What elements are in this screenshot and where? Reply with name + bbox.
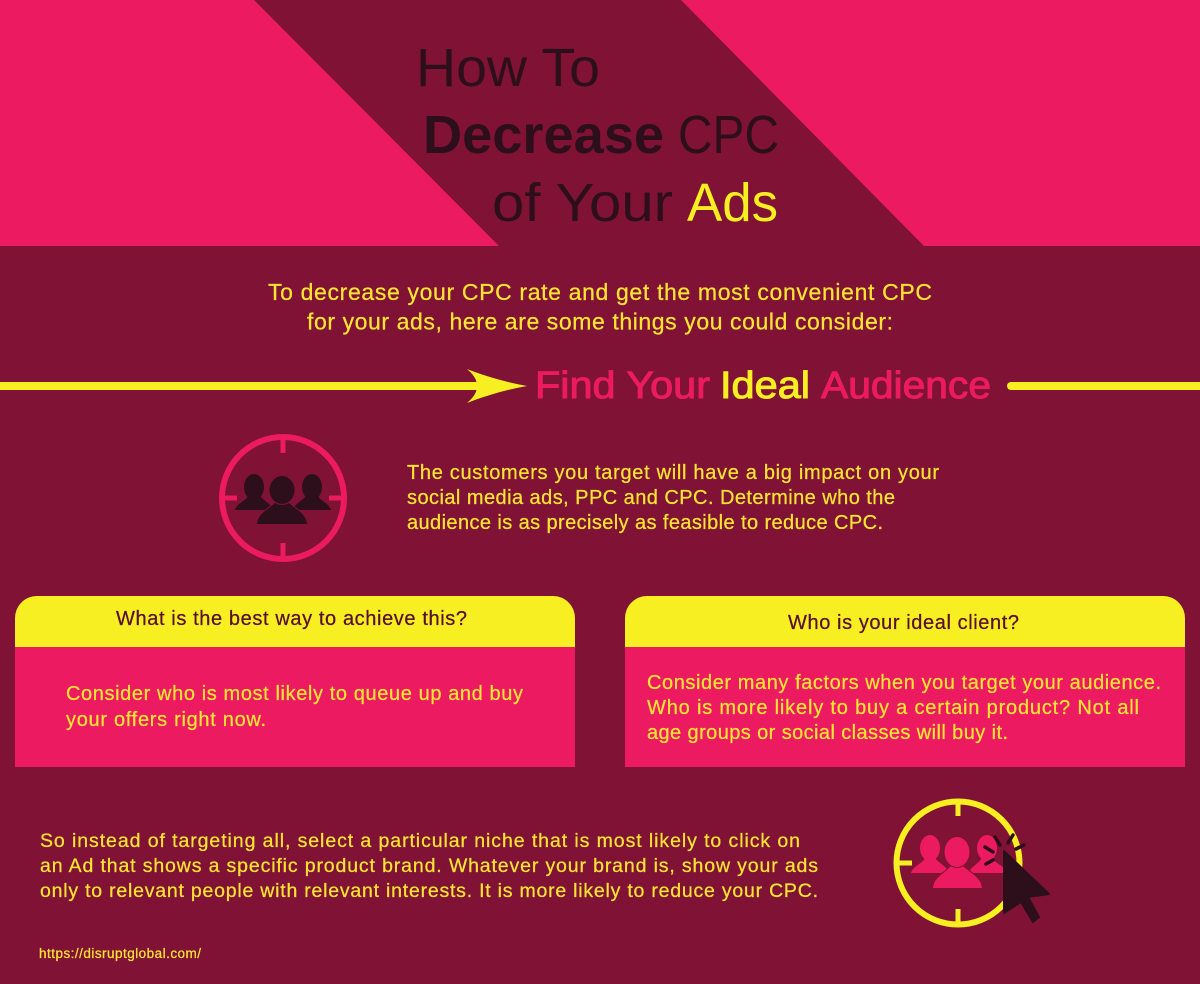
panel: best way (15, 596, 575, 767)
closing text: an Ad that shows a specific product brand. Whatever your brand is, show your ads (40, 855, 818, 877)
panel heading: ideal client (625, 596, 1185, 647)
panel text: ideal client: Consider many factors when you target your audience. (647, 672, 1161, 694)
closing text: So instead of targeting all, select a particular niche that is most likely to click on (40, 830, 800, 852)
panel heading: best way: What is the best way to achieve this? (116, 608, 467, 630)
panel heading: ideal client: Who is your ideal client? (788, 612, 1019, 634)
title (416, 38, 779, 233)
panel heading: best way (15, 596, 575, 647)
closing text: only to relevant people with relevant interests. It is more likely to reduce your CPC. (40, 880, 818, 902)
intro text: To decrease your CPC rate and get the most convenient CPC (268, 279, 932, 305)
header background shapes (0, 0, 1200, 246)
title: How To (416, 38, 600, 98)
arrow pointing to heading (0, 369, 527, 403)
intro text (268, 279, 932, 334)
panel text: best way: Consider who is most likely to queue up and buy (66, 683, 523, 705)
icon: target with cursor (896, 800, 1049, 924)
panel text: ideal client (647, 672, 1161, 744)
section heading: Audience (821, 365, 991, 407)
title: Decrease (423, 105, 664, 165)
panel text: ideal client: age groups or social classes will buy it. (647, 722, 1008, 744)
heading trailing line (1007, 382, 1200, 390)
description text: social media ads, PPC and CPC. Determine who the (407, 487, 895, 509)
section heading: Find Your (535, 365, 710, 407)
title: of Your (492, 173, 673, 233)
panel text: ideal client: Who is more likely to buy a certain product? Not all (647, 697, 1139, 719)
description text: The customers you target will have a big impact on your (407, 462, 939, 484)
panel: ideal client (625, 596, 1185, 767)
title: Ads (687, 173, 778, 233)
description text: audience is as precisely as feasible to reduce CPC. (407, 512, 883, 534)
section heading (535, 365, 991, 407)
panel text: best way: your offers right now. (66, 709, 266, 731)
section heading: Ideal (720, 365, 810, 407)
source link: https://disruptglobal.com/ (39, 946, 201, 961)
closing text (40, 830, 818, 902)
icon: audience target (220, 435, 346, 561)
title: CPC (678, 105, 779, 165)
panel text: best way (66, 683, 523, 731)
description text (407, 462, 939, 534)
intro text: for your ads, here are some things you could consider: (307, 308, 893, 334)
